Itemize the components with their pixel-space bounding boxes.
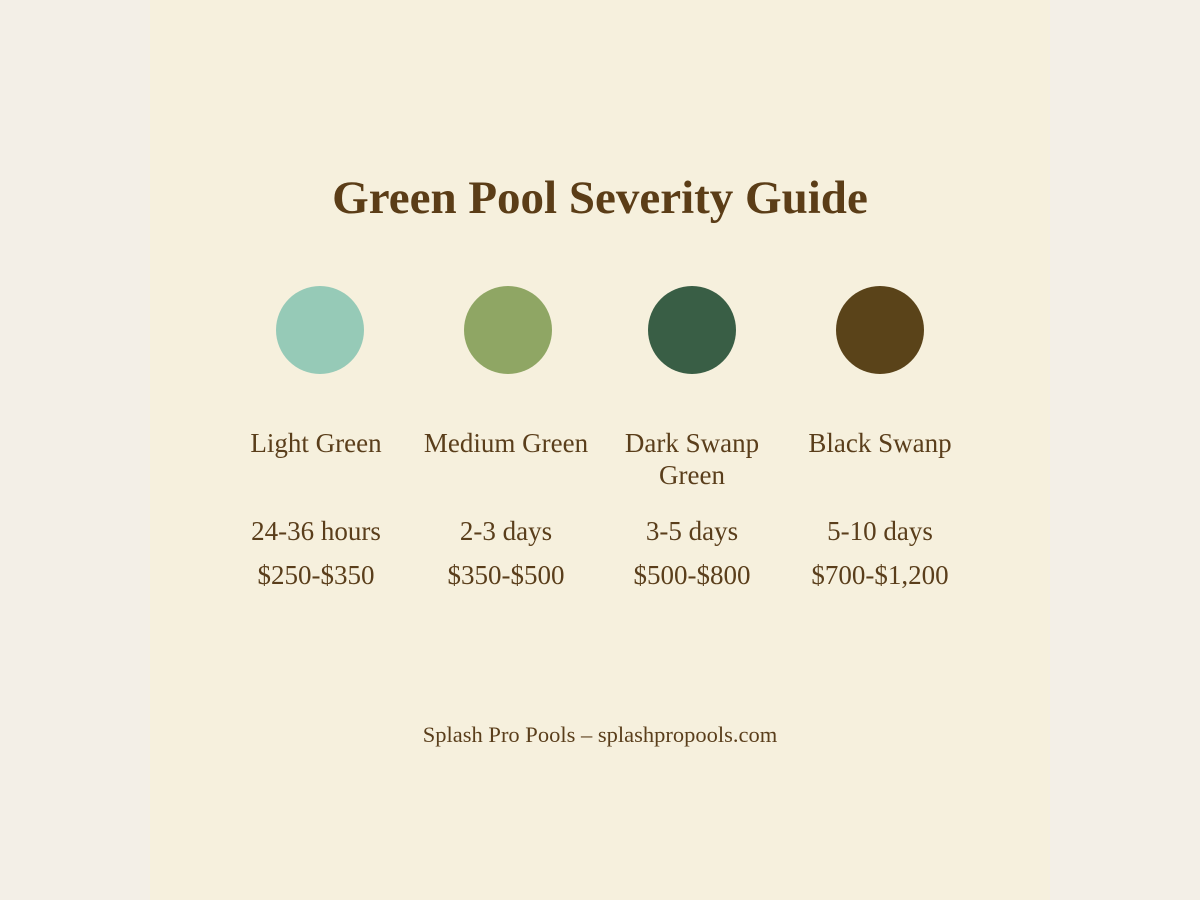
title: Green Pool Severity Guide (332, 172, 868, 224)
footer: Splash Pro Pools – splashpropools.com (423, 722, 777, 747)
text: $700-$1,200 (811, 560, 949, 590)
column: medium green (424, 428, 588, 590)
icon: light green circle (276, 286, 364, 374)
column: dark swamp green: Green (659, 460, 725, 490)
column: medium green: Medium Green (424, 428, 588, 458)
column: light green: Light Green (250, 428, 382, 458)
column: dark swamp green: 3-5 days (646, 516, 738, 546)
icon: dark swamp circle (648, 286, 736, 374)
text: $350-$500 (448, 560, 564, 590)
column: dark swamp green: Dark Swanp (625, 428, 759, 458)
column: black swamp (808, 428, 952, 590)
column: black swamp: 5-10 days (827, 516, 933, 546)
text: $250-$350 (258, 560, 374, 590)
text: $500-$800 (634, 560, 750, 590)
icon: medium green circle (464, 286, 552, 374)
panel: main (150, 0, 1050, 900)
column: dark swamp green (625, 428, 759, 590)
icon: black swamp circle (836, 286, 924, 374)
column: medium green: 2-3 days (460, 516, 552, 546)
column: light green (250, 428, 382, 590)
column: black swamp: Black Swanp (808, 428, 952, 458)
column: light green: 24-36 hours (251, 516, 381, 546)
